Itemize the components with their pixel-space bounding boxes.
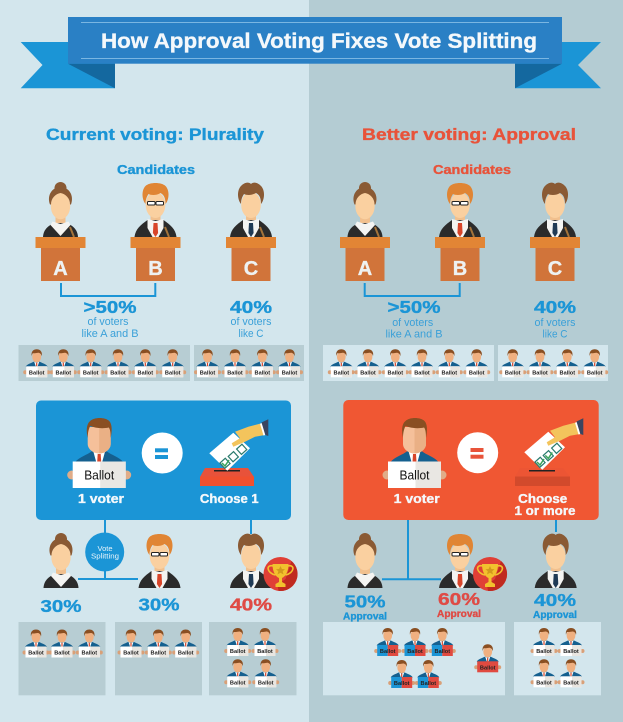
panel: approval rule box [343,400,599,520]
panel: right result A and B voters: Ballot [407,649,423,655]
right heading: Better voting: Approval [362,125,576,144]
left stat over 50 percent [82,297,138,340]
vote splitting badge: Splitting [91,552,119,560]
panel: left voters four: Ballot [200,370,215,376]
icon: voter with ballot [67,418,131,488]
right bracket A and B [365,283,460,296]
panel: right result C voters: Ballot [536,649,552,655]
left result candidate C winner: 40% [230,594,273,614]
left result candidate B [138,534,180,614]
panel: left voters six: Ballot [165,370,181,376]
left result candidate B: 30% [138,594,180,614]
icon: ballot box choose one or more [515,418,583,486]
icon: equals [142,432,183,474]
right stat over 50 percent: like A and B [386,328,442,340]
left stat 40 percent [230,297,273,340]
title banner [21,17,601,88]
right result candidate B winner: 60% [438,589,481,609]
panel: right voters four [498,345,608,381]
connector lines right [382,520,556,579]
panel: right voters six: Ballot [442,370,457,376]
Choose 1 or more label: Choose [518,492,567,506]
icon: equals [457,432,498,473]
panel: left voters six: Ballot [29,370,45,376]
right stat 40 percent: of voters [534,317,576,329]
panel: right result A and B voters: Ballot [421,681,436,687]
1 voter label: 1 voter [394,492,440,506]
panel: right voters six [323,345,494,381]
left background panel [0,0,309,722]
left stat over 50 percent: of voters [88,316,129,328]
left stat over 50 percent: like A and B [82,328,138,340]
left candidate C: C [244,258,258,280]
icon: voter with ballot [382,418,446,488]
panel: right result A and B voters [323,622,505,695]
panel: left voters four: Ballot [282,370,297,376]
right result candidate A: Approval [343,611,387,622]
panel: left result A voters: Ballot [28,650,44,656]
panel: right voters six: Ballot [469,370,485,376]
right stat 40 percent: like C [542,328,568,340]
panel: left voters six: Ballot [138,370,153,376]
panel: right result A and B voters: Ballot [480,665,496,671]
left result candidate C winner [230,534,273,614]
right result candidate A [343,533,387,622]
1 voter label: 1 voter [78,492,124,506]
Choose 1 label: Choose 1 [200,492,259,506]
left stat 40 percent: 40% [230,297,273,317]
panel: right result C voters: Ballot [563,680,579,686]
panel: left result A voters: Ballot [82,650,97,656]
vote splitting badge [85,532,124,572]
panel: left voters four: Ballot [227,370,243,376]
left stat 40 percent: like C [238,328,264,340]
right stat over 50 percent: >50% [388,297,441,317]
right result candidate B winner: Approval [437,609,481,620]
right background panel [309,0,623,722]
icon: ballot box choose one [200,419,268,486]
panel: right result C voters [514,622,601,695]
right candidate A [340,182,390,281]
panel: left result A voters [18,622,106,695]
panel: right voters four: Ballot [532,370,548,376]
right stat over 50 percent [386,297,442,340]
left candidates label: Candidates [117,163,195,177]
icon: trophy left [264,557,298,591]
panel: right voters six: Ballot [414,370,430,376]
connector lines left [78,520,251,579]
left candidate A [36,182,86,281]
panel: left result C voters [209,622,296,695]
panel: left result C voters: Ballot [258,680,274,686]
panel: left voters six: Ballot [56,370,71,376]
panel: right voters six: Ballot [388,370,403,376]
left stat over 50 percent: >50% [84,297,137,317]
right result candidate A: 50% [344,591,386,611]
panel: right result C voters: Ballot [536,680,552,686]
panel: left result C voters: Ballot [257,649,273,655]
panel: right result C voters: Ballot [563,649,579,655]
panel: left result B voters: Ballot [123,650,139,656]
panel: left voters four: Ballot [255,370,270,376]
right result candidate B winner [437,534,481,620]
panel: left result B voters: Ballot [151,650,166,656]
panel: left voters six: Ballot [83,370,99,376]
panel: left voters four [194,345,304,381]
panel: plurality rule box [36,400,291,520]
right candidate B [435,183,485,281]
left result candidate A: 30% [40,596,82,616]
panel: right voters six: Ballot [360,370,376,376]
right result candidate C: 40% [534,590,577,610]
icon: voter with ballot: Ballot [84,468,115,482]
Choose 1 or more label: 1 or more [514,504,576,518]
left candidate A: A [53,258,68,280]
right result candidate C: Approval [533,610,577,621]
right candidate B: B [453,258,467,280]
panel: left result B voters: Ballot [178,650,194,656]
left candidate C [226,183,276,281]
right candidates label: Candidates [433,163,511,177]
right candidate A: A [358,258,372,280]
panel: right voters four: Ballot [505,370,521,376]
icon: trophy right [473,557,507,591]
panel: left result A voters: Ballot [54,650,70,656]
panel: left result C voters: Ballot [230,680,246,686]
right candidate C: C [548,258,562,280]
icon: voter with ballot: Ballot [400,468,430,482]
right result candidate C [533,534,577,621]
left stat 40 percent: of voters [230,316,272,328]
left candidate B [130,183,180,281]
left candidate B: B [148,258,163,280]
vote splitting badge: Vote [98,544,112,553]
panel: left result B voters [115,622,202,695]
Choose 1 or more label [514,492,576,518]
left heading: Current voting: Plurality [46,125,265,144]
panel: left voters six [18,345,190,381]
right candidate C [530,183,580,281]
right stat 40 percent [534,297,577,340]
left result candidate A [40,533,82,616]
panel: left voters six: Ballot [110,370,126,376]
panel: left result C voters: Ballot [230,649,246,655]
panel: right voters four: Ballot [560,370,575,376]
panel: right result A and B voters: Ballot [380,649,396,655]
panel: right voters four: Ballot [587,370,603,376]
panel: right result A and B voters: Ballot [435,649,450,655]
left bracket A and B [61,283,155,296]
panel: right result A and B voters: Ballot [394,681,410,687]
right stat over 50 percent: of voters [392,317,434,329]
right stat 40 percent: 40% [534,297,577,317]
title text: How Approval Voting Fixes Vote Splitting [101,29,537,53]
panel: right voters six: Ballot [334,370,349,376]
